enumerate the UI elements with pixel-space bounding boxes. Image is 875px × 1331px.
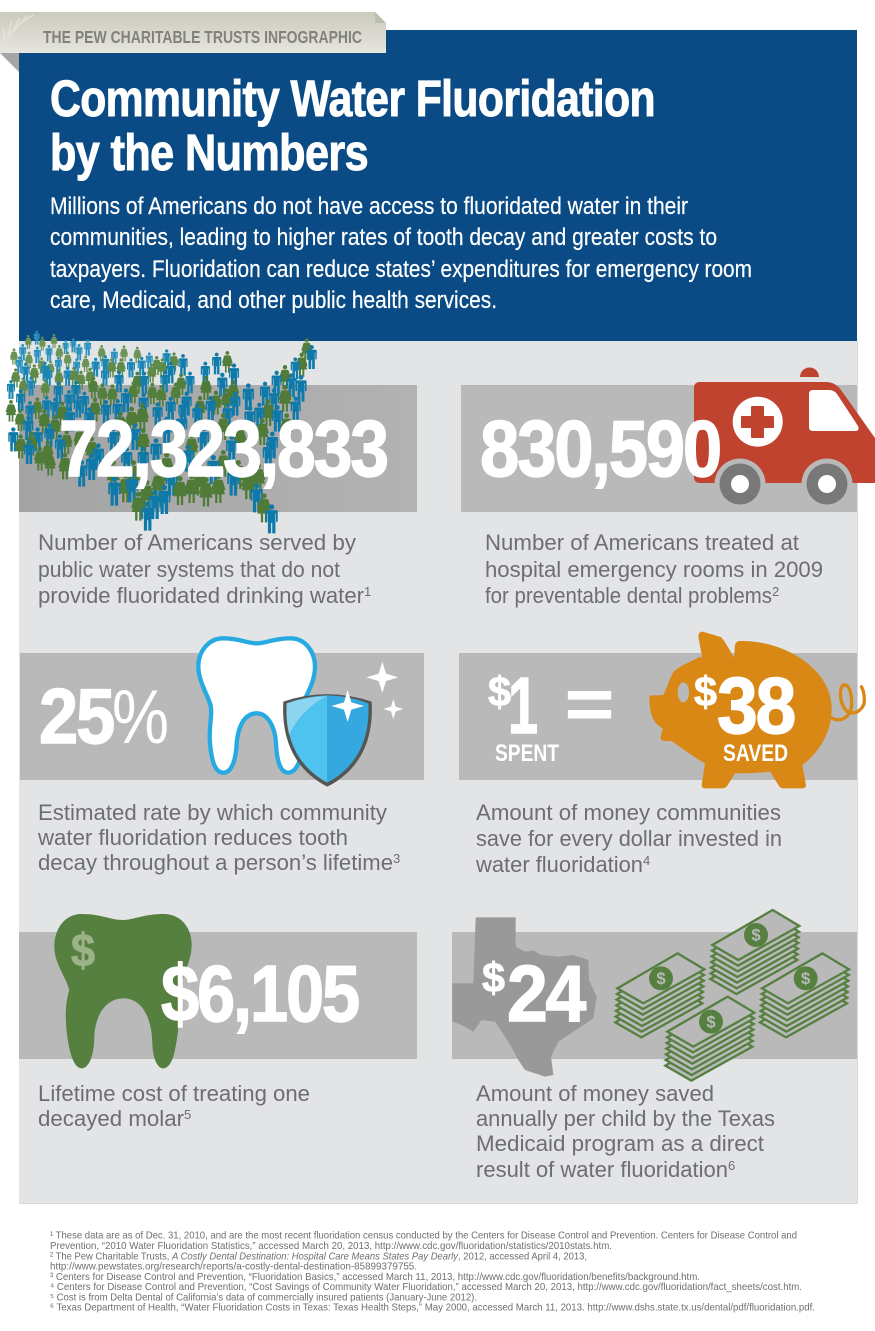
caption: Americans without fluoridated water (38, 530, 371, 608)
caption: Texas Medicaid savings (476, 1081, 775, 1182)
footnotes: ² The Pew Charitable Trusts, A Costly Dental Destination: Hospital Care Means States Pay Dearly, 2012, accessed April 4, 2013, (50, 1252, 587, 1262)
title: Community Water Fluoridation (50, 70, 655, 127)
caption: emergency rooms: 2 (772, 584, 779, 599)
icon: stacks of money: $ (656, 969, 666, 988)
caption: tooth decay reduction: decay throughout a person’s lifetime (38, 850, 393, 875)
grey content panel (19, 341, 858, 1204)
icon: ambulance (694, 368, 875, 510)
stat band 4 (459, 653, 857, 780)
intro paragraph (50, 193, 752, 314)
title (50, 70, 655, 181)
caption: tooth decay reduction: Estimated rate by which community (38, 800, 388, 825)
caption: Texas Medicaid savings: Medicaid program as a direct (476, 1131, 765, 1156)
caption: emergency rooms: Number of Americans treated at (485, 530, 800, 555)
footnotes: http://www.pewstates.org/research/reports/a-costly-dental-destination-85899379755. (50, 1262, 417, 1272)
caption: Texas Medicaid savings: Amount of money saved (476, 1081, 714, 1106)
stat: $1 spent: SPENT (495, 740, 559, 767)
stat: $24: 24 (507, 949, 587, 1038)
icon: tooth with shield (198, 638, 403, 787)
footnotes: Prevention, “2010 Water Fluoridation Statistics,” accessed March 20, 2013, http://www.cdc.gov/fluoridation/statistics/2010stats.htm. (50, 1241, 612, 1252)
stat: $24: $ (482, 954, 505, 1001)
caption: money saved per dollar (475, 800, 782, 877)
caption: tooth decay reduction: water fluoridation reduces tooth (37, 825, 348, 850)
footnotes (50, 1230, 815, 1314)
stat: $38 saved: SAVED (723, 740, 788, 767)
caption: money saved per dollar: 4 (643, 853, 650, 868)
footnotes: ¹ These data are as of Dec. 31, 2010, and are the most recent fluoridation census conducted by the Centers for Disease Control and Prevention. Centers for Disease Control and (50, 1230, 797, 1242)
caption: money saved per dollar: save for every dollar invested in (476, 826, 782, 851)
icon: stacks of money: $ (751, 926, 761, 945)
stat band 3 (20, 653, 424, 780)
footnotes: ⁵ Cost is from Delta Dental of California’s data of commercially insured patients (January-June 2012). (50, 1292, 477, 1304)
caption: Texas Medicaid savings: annually per child by the Texas (476, 1106, 775, 1131)
icon: map of United States made of people (6, 331, 317, 533)
intro paragraph: communities, leading to higher rates of tooth decay and greater costs to (50, 224, 717, 251)
caption: tooth decay reduction: 3 (393, 851, 400, 866)
caption: emergency rooms: for preventable dental problems (485, 583, 772, 608)
caption: cost of treating molar (38, 1081, 310, 1131)
caption: Americans without fluoridated water: public water systems that do not (38, 557, 341, 582)
footnotes: ⁶ Texas Department of Health, “Water Fluoridation Costs in Texas: Texas Health Steps,” May 2000, accessed March 11, 2013. http://www.dshs.state.tx.us/dental/pdf/fluoridation.pdf. (50, 1302, 815, 1314)
icon: stacks of money (615, 910, 849, 1081)
caption: emergency rooms: hospital emergency rooms in 2009 (485, 557, 823, 582)
stat number: 830,590: 830,590 (480, 404, 720, 493)
stat number: 25%: % (112, 675, 169, 760)
stat: $38 saved (694, 661, 795, 767)
caption: cost of treating molar: 5 (184, 1107, 191, 1122)
stat band 2 (461, 385, 857, 512)
footnotes: ⁴ Centers for Disease Control and Prevention, “Cost Savings of Community Water Fluoridation,” accessed March 20, 2013, http://www.cdc.gov/fluoridation/fact_sheets/cost.htm. (50, 1282, 802, 1293)
blue header panel (19, 30, 857, 341)
ribbon tab (0, 12, 386, 72)
stat: $1 spent: 1 (508, 661, 538, 750)
icon: stacks of money: $ (801, 969, 811, 988)
icon: Texas map (452, 917, 597, 1077)
caption: cost of treating molar: decayed molar (38, 1106, 184, 1131)
stat: $1 spent: $ (488, 668, 511, 715)
title: by the Numbers (50, 124, 368, 181)
stat: $38 saved: $ (694, 668, 717, 715)
caption: Americans without fluoridated water: Number of Americans served by (38, 530, 357, 555)
caption: tooth decay reduction (37, 800, 400, 875)
stat band 1 (19, 385, 417, 512)
stat number: 25% (39, 672, 169, 760)
caption: cost of treating molar: Lifetime cost of treating one (38, 1081, 310, 1106)
stat number: $6,105: $6,105 (161, 949, 359, 1038)
icon: green tooth with dollar sign (54, 914, 192, 1068)
stat number: 25%: 25 (39, 672, 114, 760)
dollar sign on tooth: $ (71, 924, 95, 976)
icon: piggy bank (649, 632, 864, 788)
caption: emergency rooms (485, 530, 823, 608)
equals sign: = (565, 665, 614, 743)
caption: money saved per dollar: Amount of money communities (476, 800, 781, 825)
stat number: 72,323,833: 72,323,833 (59, 404, 387, 493)
stat: $1 spent (488, 661, 559, 767)
intro paragraph: Millions of Americans do not have access to fluoridated water in their (50, 193, 688, 220)
caption: Texas Medicaid savings: result of water fluoridation (476, 1157, 728, 1182)
caption: Texas Medicaid savings: 6 (728, 1158, 735, 1173)
caption: money saved per dollar: water fluoridation (475, 852, 643, 877)
tab label: THE PEW CHARITABLE TRUSTS INFOGRAPHIC (43, 27, 362, 47)
stat band 6 (452, 932, 857, 1059)
footnotes: ³ Centers for Disease Control and Prevention, “Fluoridation Basics,” accessed March 11, 2013, http://www.cdc.gov/fluoridation/benefits/background.htm. (50, 1272, 700, 1283)
intro paragraph: taxpayers. Fluoridation can reduce states’ expenditures for emergency room (50, 256, 752, 283)
icon: stacks of money: $ (706, 1012, 716, 1031)
caption: Americans without fluoridated water: provide fluoridated drinking water (38, 583, 364, 608)
caption: Americans without fluoridated water: 1 (364, 584, 371, 599)
intro paragraph: care, Medicaid, and other public health services. (50, 287, 497, 314)
stat: $38 saved: 38 (717, 661, 795, 750)
stat band 5 (19, 932, 417, 1059)
